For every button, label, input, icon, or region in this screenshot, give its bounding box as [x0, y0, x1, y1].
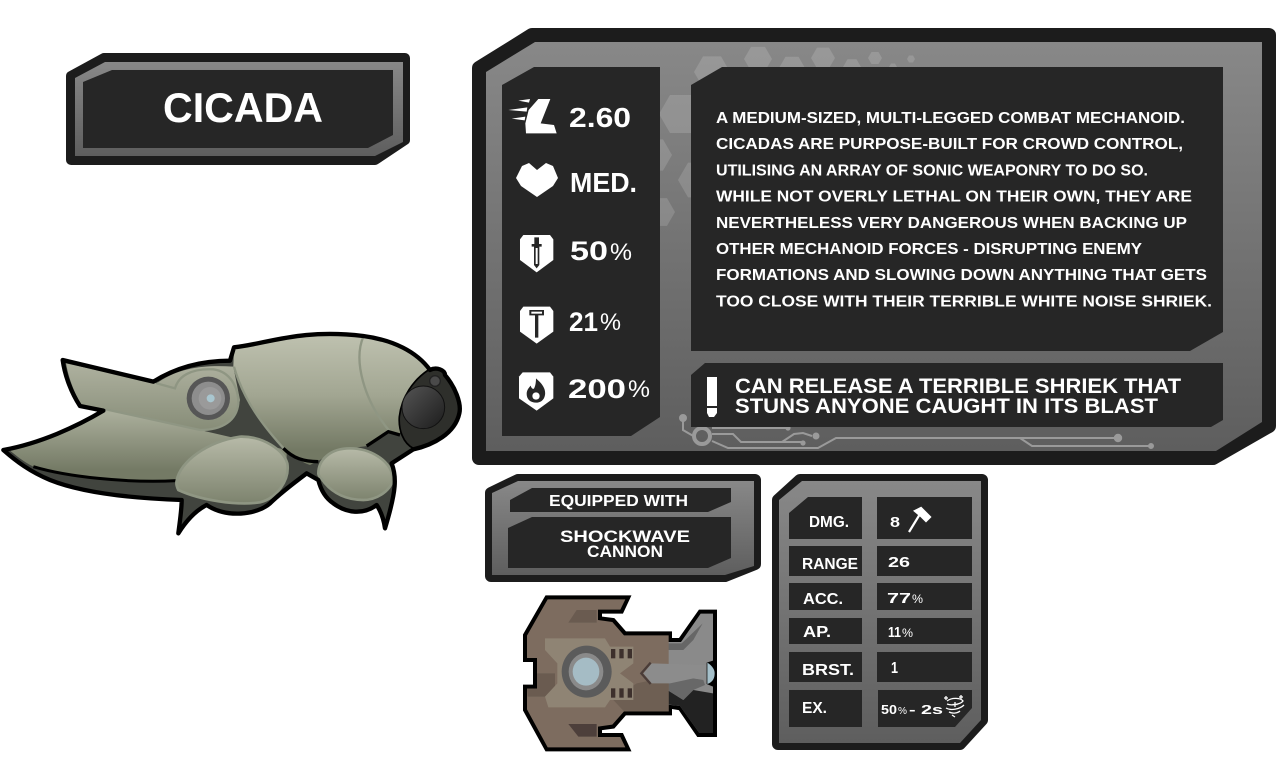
callout text: STUNS ANYONE CAUGHT IN ITS BLAST — [735, 395, 1158, 418]
icon: heart — [516, 163, 558, 197]
panel: creature stats — [502, 67, 660, 436]
row: burst: BRST. — [802, 662, 854, 679]
text block: description: CICADAS ARE PURPOSE-BUILT FOR CROWD CONTROL, — [716, 136, 1183, 153]
row: extra effect: EX. — [802, 700, 827, 717]
row: burst — [789, 652, 972, 682]
stat: fire armour — [568, 374, 650, 404]
row: armour penetration — [789, 618, 972, 644]
callout text: CAN RELEASE A TERRIBLE SHRIEK THAT — [735, 375, 1181, 398]
stat: ballistic armour — [569, 307, 621, 337]
stat: ballistic armour: 21 — [569, 307, 598, 337]
icon: stun — [944, 695, 964, 717]
row: burst: 1 — [891, 660, 898, 677]
panel: name plate — [71, 58, 405, 160]
row: extra effect: 50 — [881, 702, 897, 717]
row: range — [789, 546, 972, 576]
row: accuracy: ACC. — [803, 591, 843, 608]
icon: melee armour shield — [520, 235, 553, 272]
text block: description: OTHER MECHANOID FORCES - DISRUPTING ENEMY — [716, 241, 1143, 258]
text block: description: WHILE NOT OVERLY LETHAL ON THEIR OWN, THEY ARE — [716, 188, 1192, 206]
heading: equipped with: EQUIPPED WITH — [549, 493, 688, 510]
text block: description — [716, 110, 1212, 310]
stat: melee armour: 50 — [570, 236, 608, 266]
row: armour penetration: AP. — [803, 624, 831, 641]
row: damage — [789, 497, 972, 539]
row: extra effect — [789, 690, 972, 727]
text block: description: NEVERTHELESS VERY DANGEROUS WHEN BACKING UP — [716, 215, 1187, 232]
illustration: shockwave cannon — [525, 597, 715, 749]
stat: health: MED. — [570, 167, 637, 198]
row: range: 26 — [888, 554, 910, 571]
stat: melee armour — [570, 236, 632, 266]
row: accuracy: % — [912, 592, 923, 606]
stat: ballistic armour: % — [600, 309, 621, 336]
panel: equipped weapon — [491, 480, 755, 576]
panel: description — [691, 67, 1223, 351]
icon: hammer — [909, 508, 930, 532]
title: CICADA — [163, 84, 323, 131]
row: accuracy: 77 — [887, 590, 911, 607]
icon: ballistic armour shield — [520, 307, 553, 344]
icon: speed boot — [508, 99, 557, 133]
text block: description: UTILISING AN ARRAY OF SONIC WEAPONRY TO DO SO. — [716, 162, 1148, 180]
row: armour penetration: 11 — [888, 624, 901, 641]
icon: exclamation mark — [707, 377, 717, 417]
callout text — [735, 375, 1181, 418]
stat: fire armour: 200 — [568, 374, 626, 404]
weapon name: SHOCKWAVE — [560, 527, 690, 546]
text block: description: FORMATIONS AND SLOWING DOWN ANYTHING THAT GETS — [716, 267, 1207, 284]
row: accuracy — [789, 583, 972, 610]
weapon name: CANNON — [587, 542, 663, 561]
row: extra effect: % — [898, 706, 907, 717]
icon: fire armour shield — [519, 372, 553, 411]
callout: special ability — [691, 363, 1223, 427]
panel: weapon stats — [778, 480, 982, 744]
row: damage: 8 — [890, 514, 900, 531]
panel: main info — [479, 35, 1269, 458]
weapon name — [560, 527, 690, 561]
stat: melee armour: % — [610, 239, 632, 266]
row: damage: DMG. — [809, 514, 849, 531]
illustration: cicada mechanoid — [3, 334, 460, 533]
stat: fire armour: % — [628, 376, 650, 403]
row: extra effect: - 2s — [909, 702, 943, 717]
row: armour penetration: % — [902, 626, 913, 640]
row: range: RANGE — [802, 556, 858, 573]
text block: description: TOO CLOSE WITH THEIR TERRIBLE WHITE NOISE SHRIEK. — [716, 294, 1212, 310]
stat: speed: 2.60 — [569, 102, 631, 133]
text block: description: A MEDIUM-SIZED, MULTI-LEGGED COMBAT MECHANOID. — [716, 110, 1185, 127]
